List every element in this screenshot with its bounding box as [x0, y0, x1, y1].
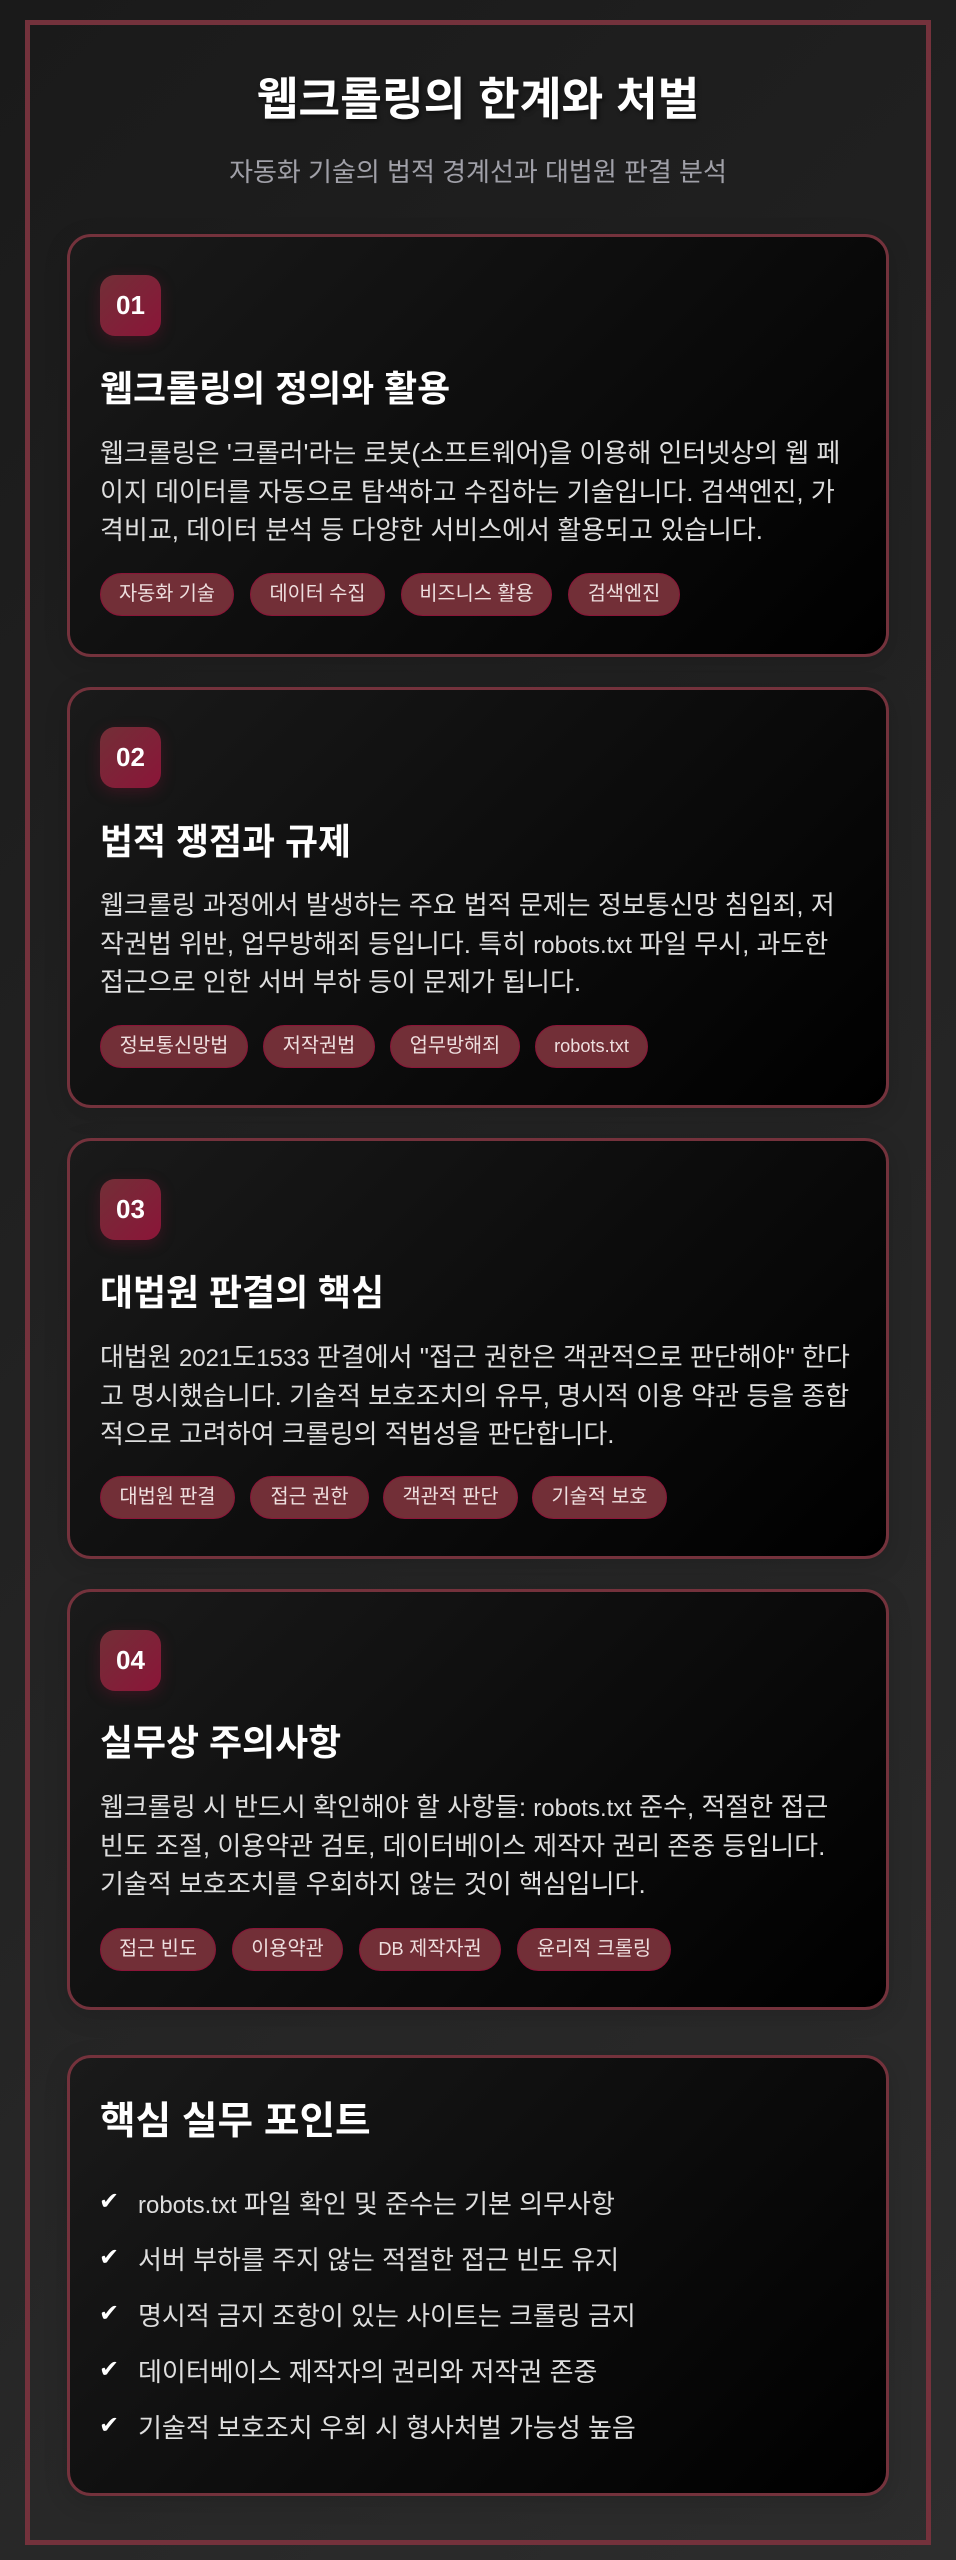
- tags 03: 객관적 판단: [402, 1486, 499, 1508]
- body text 03: 고 명시했습니다. 기술적 보호조치의 유무, 명시적 이용 약관 등을 종합: [100, 1381, 849, 1411]
- body text 01: [100, 438, 840, 545]
- panel: key practical points: 서버 부하를 주지 않는 적절한 접근 빈도 유지: [138, 2245, 619, 2275]
- tags 01: 검색엔진: [588, 583, 660, 605]
- tags 02: 업무방해죄: [410, 1035, 500, 1057]
- tags 02: robots.txt: [554, 1036, 629, 1056]
- checklist item 2: [99, 2243, 619, 2275]
- title: 웹크롤링의 한계와 처벌: [257, 74, 699, 125]
- body text 02: [100, 890, 835, 997]
- checklist item 4: [99, 2355, 597, 2387]
- body text 02: 작권법 위반, 업무방해죄 등입니다. 특히 robots.txt 파일 무시, 과도한: [100, 929, 828, 959]
- heading 04: 실무상 주의사항: [100, 1723, 341, 1763]
- panel: key practical points: ✔: [99, 2187, 119, 2215]
- body text 02: 웹크롤링 과정에서 발생하는 주요 법적 문제는 정보통신망 침입죄, 저: [100, 890, 835, 920]
- panel: key practical points: [67, 2055, 889, 2496]
- tags 02: [100, 1025, 648, 1068]
- tags 01: 자동화 기술: [119, 583, 215, 605]
- body text 03: 대법원 2021도1533 판결에서 "접근 권한은 객관적으로 판단해야" 한다: [100, 1342, 850, 1372]
- heading 02: 법적 쟁점과 규제: [100, 822, 351, 862]
- tags 01: 데이터 수집: [269, 583, 366, 605]
- badge 01: 01: [116, 290, 145, 320]
- tags 01: 비즈니스 활용: [419, 583, 534, 605]
- body text 04: 웹크롤링 시 반드시 확인해야 할 사항들: robots.txt 준수, 적절한 접근: [100, 1792, 828, 1822]
- tags 02: 정보통신망법: [120, 1035, 228, 1057]
- tags 04: DB 제작자권: [378, 1938, 482, 1960]
- heading: key points: 핵심 실무 포인트: [100, 2100, 371, 2143]
- tags 04: [100, 1928, 671, 1971]
- panel: 04 practical cautions: [67, 1589, 889, 2010]
- checklist item 1: [99, 2187, 615, 2219]
- badge 04: 04: [116, 1645, 145, 1675]
- panel: key practical points: ✔: [99, 2355, 119, 2383]
- body text 01: 격비교, 데이터 분석 등 다양한 서비스에서 활용되고 있습니다.: [100, 515, 763, 545]
- tags 03: [100, 1476, 667, 1519]
- panel: key practical points: 명시적 금지 조항이 있는 사이트는 크롤링 금지: [138, 2301, 636, 2331]
- checklist item 5: [99, 2411, 636, 2443]
- badge 04: [100, 1630, 161, 1691]
- body text 04: 기술적 보호조치를 우회하지 않는 것이 핵심입니다.: [100, 1869, 646, 1899]
- panel: key practical points: ✔: [99, 2411, 119, 2439]
- checklist item 3: [99, 2299, 636, 2331]
- heading 01: 웹크롤링의 정의와 활용: [100, 369, 450, 409]
- heading 03: 대법원 판결의 핵심: [100, 1273, 384, 1313]
- panel: 03 supreme court ruling: [67, 1138, 889, 1559]
- tags 03: 기술적 보호: [551, 1486, 648, 1508]
- panel: 01 definition and use: [67, 234, 889, 657]
- badge 02: 02: [116, 742, 145, 772]
- subtitle: 자동화 기술의 법적 경계선과 대법원 판결 분석: [229, 157, 727, 187]
- badge 02: [100, 727, 161, 788]
- tags 01: [100, 573, 680, 616]
- tags 04: 이용약관: [251, 1938, 324, 1960]
- body text 01: 웹크롤링은 '크롤러'라는 로봇(소프트웨어)을 이용해 인터넷상의 웹 페: [100, 438, 840, 468]
- panel: key practical points: 데이터베이스 제작자의 권리와 저작권 존중: [138, 2357, 597, 2387]
- body text 02: 접근으로 인한 서버 부하 등이 문제가 됩니다.: [100, 967, 581, 997]
- body text 01: 이지 데이터를 자동으로 탐색하고 수집하는 기술입니다. 검색엔진, 가: [100, 477, 835, 507]
- badge 03: 03: [116, 1194, 145, 1224]
- body text 03: [100, 1342, 850, 1449]
- tags 03: 대법원 판결: [119, 1486, 216, 1508]
- panel: key practical points: robots.txt 파일 확인 및 준수는 기본 의무사항: [138, 2189, 615, 2219]
- tags 04: 윤리적 크롤링: [537, 1938, 651, 1960]
- body text 03: 적으로 고려하여 크롤링의 적법성을 판단합니다.: [100, 1419, 615, 1449]
- tags 02: 저작권법: [283, 1035, 355, 1057]
- tags 03: 접근 권한: [271, 1486, 348, 1508]
- panel: 02 legal issues: [67, 687, 889, 1108]
- body text 04: 빈도 조절, 이용약관 검토, 데이터베이스 제작자 권리 존중 등입니다.: [100, 1831, 825, 1861]
- badge 03: [100, 1179, 161, 1240]
- panel: key practical points: ✔: [99, 2299, 119, 2327]
- badge 01: [100, 275, 161, 336]
- panel: key practical points: ✔: [99, 2243, 119, 2271]
- panel: key practical points: 기술적 보호조치 우회 시 형사처벌 가능성 높음: [138, 2413, 636, 2443]
- tags 04: 접근 빈도: [119, 1938, 197, 1960]
- body text 04: [100, 1792, 828, 1899]
